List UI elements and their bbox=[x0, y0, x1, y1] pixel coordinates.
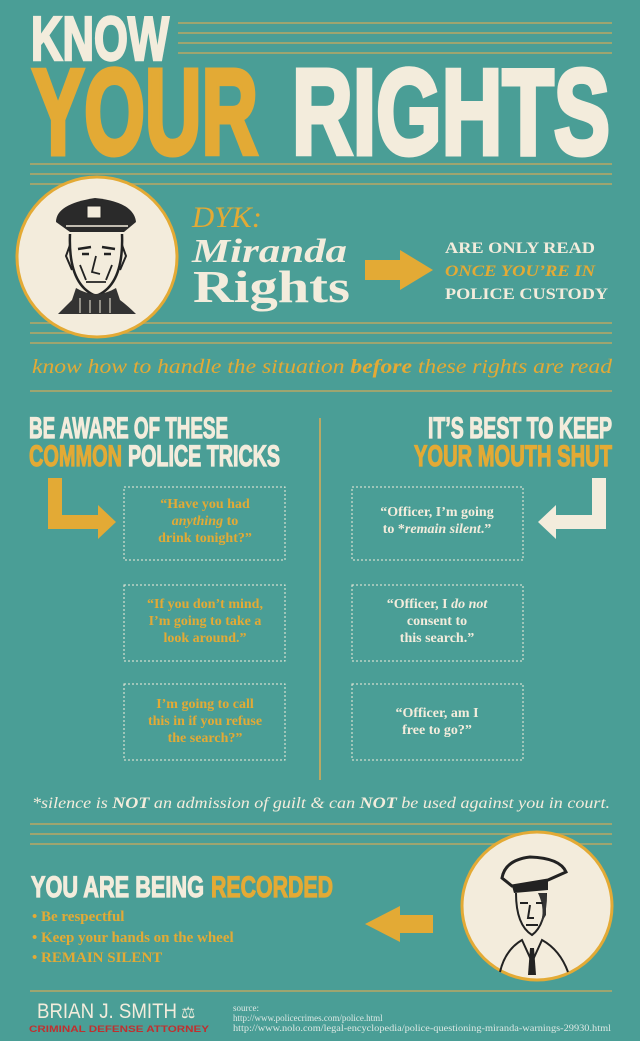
title: KNOW bbox=[31, 5, 169, 74]
text: only read once in custody bbox=[445, 240, 608, 303]
list: tips: • REMAIN SILENT bbox=[32, 950, 162, 966]
quotes: police tricks: this in if you refuse bbox=[148, 714, 262, 729]
heading: police tricks: POLICE TRICKS bbox=[128, 440, 280, 473]
quotes: responses: this search.” bbox=[400, 631, 474, 646]
list: tips: • Keep your hands on the wheel bbox=[32, 930, 234, 946]
quotes: police tricks: I’m going to call bbox=[156, 697, 254, 712]
arrow: left bbox=[365, 906, 433, 942]
text: only read once in custody: ONCE YOU’RE IN bbox=[445, 263, 597, 280]
footer: logo: ⚖ bbox=[181, 1005, 195, 1022]
footer: sources: source: bbox=[233, 1003, 259, 1013]
heading: DYK Miranda Rights: DYK: bbox=[191, 201, 262, 234]
quotes: police tricks bbox=[147, 497, 263, 746]
quotes: police tricks: I’m going to take a bbox=[149, 614, 261, 629]
quotes: police tricks: look around.” bbox=[164, 631, 246, 646]
heading: being recorded: RECORDED bbox=[211, 871, 333, 904]
text: only read once in custody: ARE ONLY READ bbox=[445, 240, 595, 257]
footer: logo: BRIAN J. SMITH bbox=[37, 1000, 177, 1023]
quotes: responses: “Officer, I’m going bbox=[380, 505, 494, 520]
heading: police tricks: BE AWARE OF THESE bbox=[29, 412, 228, 445]
quotes: responses bbox=[380, 505, 494, 738]
footer: logo bbox=[29, 1000, 209, 1034]
footer: sources bbox=[233, 1003, 612, 1033]
quotes: police tricks: “If you don’t mind, bbox=[147, 597, 263, 612]
quotes: responses: to *remain silent.” bbox=[383, 522, 491, 537]
icon: officer portrait 2 bbox=[462, 832, 612, 980]
footer: logo: CRIMINAL DEFENSE ATTORNEY bbox=[29, 1024, 209, 1034]
footnote: *silence is NOT an admission of guilt & can NOT be used against you in court. bbox=[32, 795, 610, 812]
quotes: police tricks: “Have you had bbox=[160, 497, 250, 512]
heading: police tricks: COMMON bbox=[29, 440, 122, 473]
arrow: curved right bbox=[538, 478, 606, 539]
list: tips: • Be respectful bbox=[32, 909, 124, 925]
quotes: responses: “Officer, am I bbox=[395, 706, 479, 721]
heading: DYK Miranda Rights bbox=[191, 201, 350, 312]
heading: police tricks bbox=[29, 412, 280, 473]
text: only read once in custody: POLICE CUSTODY bbox=[445, 286, 608, 303]
quotes: responses: free to go?” bbox=[402, 723, 472, 738]
title: YOUR bbox=[32, 44, 258, 180]
list: tips bbox=[32, 909, 234, 966]
quotes: police tricks: anything to bbox=[172, 514, 238, 529]
subtitle: know how to handle the situation before these rights are read bbox=[32, 356, 613, 378]
quotes: police tricks: drink tonight?” bbox=[158, 531, 252, 546]
arrow: curved left bbox=[48, 478, 116, 539]
quotes: responses: consent to bbox=[407, 614, 467, 629]
heading: mouth shut bbox=[414, 412, 612, 473]
footer: sources: http://www.policecrimes.com/police.html bbox=[233, 1013, 383, 1023]
footer: sources: http://www.nolo.com/legal-encyclopedia/police-questioning-miranda-warnings-29930.html bbox=[233, 1023, 612, 1033]
quotes: police tricks: the search?” bbox=[168, 731, 242, 746]
quotes: responses: “Officer, I do not bbox=[387, 597, 488, 612]
arrow: right bbox=[365, 250, 433, 290]
heading: being recorded: YOU ARE BEING bbox=[31, 871, 204, 904]
icon: police officer portrait bbox=[17, 177, 177, 337]
heading: DYK Miranda Rights: Miranda bbox=[191, 233, 347, 270]
heading: DYK Miranda Rights: Rights bbox=[193, 261, 350, 312]
title bbox=[31, 5, 610, 180]
